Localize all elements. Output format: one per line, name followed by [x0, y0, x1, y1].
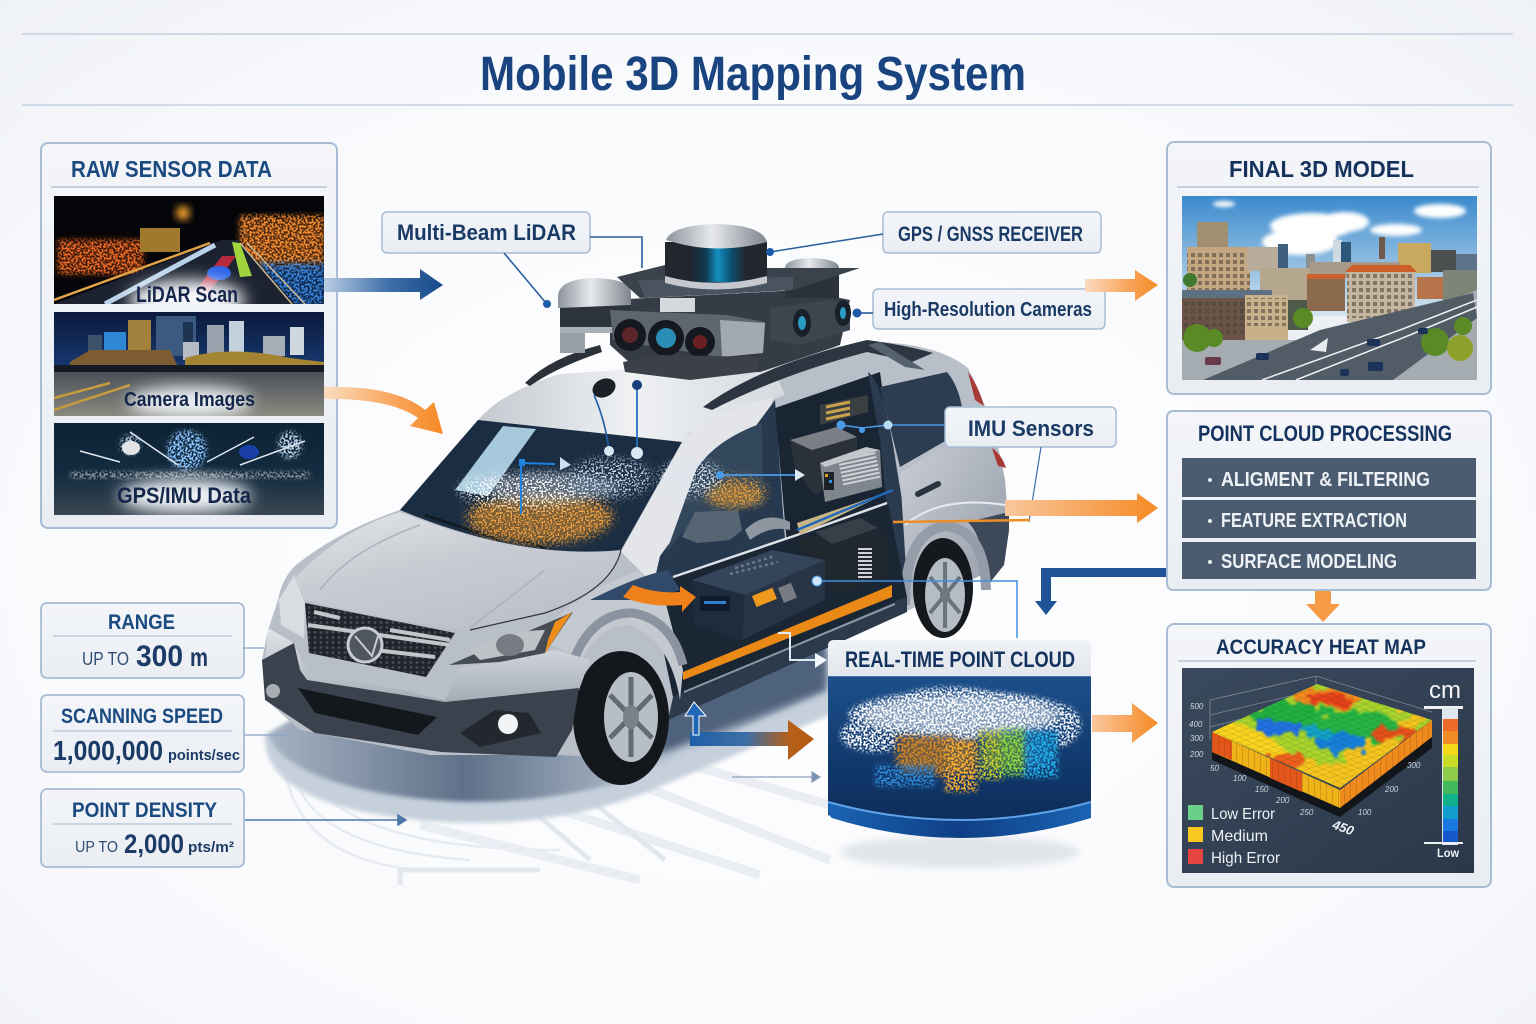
axis labels: 250 — [1299, 808, 1314, 817]
pillar between compartments — [868, 372, 908, 600]
stat: scanning speed — [41, 695, 244, 772]
door trim — [745, 518, 790, 540]
stat: scanning speed: SCANNING SPEED — [61, 705, 223, 728]
roof — [478, 360, 785, 442]
arrow: sill to point cloud — [778, 633, 827, 668]
roof rack right — [703, 340, 933, 410]
label: Camera Images — [124, 389, 255, 411]
base lip — [828, 802, 1091, 838]
tail lights — [968, 372, 1006, 468]
axis labels: 500 — [1190, 702, 1204, 711]
roof rack left — [525, 345, 602, 386]
right pod — [785, 258, 839, 298]
beige shelf — [797, 490, 893, 535]
arrow: small ground arrow — [732, 772, 820, 782]
rear wheel arch — [905, 526, 986, 605]
stat: range: RANGE — [108, 611, 175, 634]
grille — [305, 603, 455, 677]
callout: multi-beam lidar — [382, 212, 590, 253]
heading: RAW SENSOR DATA — [71, 156, 272, 182]
color scale — [1424, 677, 1463, 860]
orange-red patches on face — [1212, 732, 1302, 792]
right face — [1340, 720, 1432, 808]
axis labels: 100 — [1358, 808, 1372, 817]
fog light housing — [460, 710, 541, 747]
left pod — [558, 278, 631, 353]
panel: accuracy heat map — [1167, 624, 1491, 887]
stat: point density: POINT DENSITY — [72, 799, 217, 822]
axis labels: 150 — [1255, 785, 1269, 794]
stat: range: UP TO — [82, 649, 129, 669]
stat: point density — [41, 789, 244, 867]
axis labels — [1189, 702, 1421, 839]
lower intake — [298, 688, 437, 735]
axis labels: 100 — [1233, 774, 1247, 783]
panel: real-time point cloud — [828, 640, 1091, 838]
windshield connector lines — [519, 380, 805, 514]
step: surface modeling: SURFACE MODELING — [1221, 551, 1397, 573]
left fog light — [266, 684, 280, 698]
windshield glare — [455, 426, 536, 496]
heading: ACCURACY HEAT MAP — [1216, 636, 1426, 659]
arrow: to final model — [1085, 270, 1158, 301]
lower sill — [668, 597, 907, 720]
axis labels: 300 — [1407, 761, 1421, 770]
callout: imu sensors — [945, 407, 1116, 447]
equipment deck — [610, 290, 850, 372]
title: Mobile 3D Mapping System — [480, 48, 1026, 101]
left face — [1212, 732, 1340, 808]
arrow: camera images to vehicle — [324, 387, 443, 434]
axis labels: 50 — [1210, 764, 1219, 773]
face voxel grid — [1212, 720, 1432, 808]
panel: point cloud processing — [1167, 411, 1491, 590]
badge — [348, 628, 382, 662]
axis labels: 400 — [1189, 720, 1203, 729]
dark shadow under sill — [590, 640, 826, 770]
front bumper silver — [265, 628, 590, 703]
front bumper dark — [262, 643, 579, 757]
A pillar and door — [621, 398, 772, 590]
rear window — [880, 372, 962, 467]
left headlight — [279, 575, 305, 638]
step: alignment and filtering — [1182, 458, 1476, 497]
arrow: to point cloud processing — [1005, 493, 1158, 523]
step: feature extraction: FEATURE EXTRACTION — [1221, 510, 1407, 532]
arrow: to heat map — [1092, 703, 1158, 743]
step: feature extraction — [1182, 500, 1476, 538]
arrow: lower flow — [690, 720, 814, 760]
leader lines: multi-beam lidar — [504, 237, 642, 308]
car body silhouette — [262, 342, 1009, 760]
front wheel — [573, 651, 669, 785]
rear lower dark panel — [968, 512, 1009, 590]
mounting rails — [617, 265, 860, 298]
image: lidar scan — [54, 196, 324, 304]
stat: point density: pts/m² — [188, 839, 234, 856]
arrow: processing to heat map — [1306, 590, 1340, 622]
axis labels: 450 — [1329, 816, 1357, 839]
front fender — [540, 570, 683, 700]
camera mount — [623, 355, 760, 380]
step: surface modeling — [1182, 542, 1476, 579]
axis labels: 300 — [1190, 734, 1204, 743]
car ground shadow — [268, 640, 826, 802]
stat: range: m — [190, 642, 208, 672]
second lower box — [800, 518, 888, 593]
step: alignment and filtering: ALIGMENT & FILTERING — [1221, 469, 1430, 491]
arrow: point density — [245, 815, 406, 825]
camera block — [610, 298, 765, 357]
cutaway upper compartment — [775, 372, 898, 545]
axis labels: 200 — [1384, 785, 1399, 794]
callout: high-resolution cameras: High-Resolution Cameras — [884, 299, 1092, 321]
callout: gps receiver: GPS / GNSS RECEIVER — [898, 223, 1083, 246]
fog light — [498, 714, 518, 734]
leader: recorder to point cloud — [812, 576, 1017, 638]
color scale: Low — [1437, 846, 1460, 860]
axis labels: 200 — [1189, 750, 1204, 759]
legend: Medium — [1211, 828, 1268, 845]
shadow under point cloud panel — [840, 836, 1080, 868]
panel: final 3d model — [1167, 142, 1491, 394]
stat: point density: 2,000 — [124, 829, 184, 859]
heat surface — [1212, 684, 1432, 788]
callout: imu sensors: IMU Sensors — [968, 416, 1094, 441]
arrow: up — [685, 702, 706, 735]
stat: scanning speed: points/sec — [168, 747, 240, 764]
hood — [295, 512, 621, 630]
chart background — [1182, 668, 1474, 873]
floor map pattern — [285, 765, 830, 885]
stat: point density: UP TO — [75, 839, 118, 856]
upper rack boxes — [790, 395, 882, 502]
car outer ground shadow — [265, 650, 830, 823]
door window point cloud — [658, 460, 767, 508]
window sill trim — [673, 503, 887, 577]
front door panel — [650, 400, 785, 600]
stat: range — [41, 603, 244, 678]
label: GPS/IMU Data — [117, 483, 252, 508]
stat: range: 300 — [136, 640, 183, 673]
right headlight — [449, 612, 573, 665]
orange sill stripe — [683, 585, 892, 680]
roof sensor assembly — [558, 224, 860, 380]
legend — [1188, 805, 1281, 867]
base plate — [1212, 735, 1432, 817]
front door window — [665, 423, 763, 556]
arrow: lidar scan to vehicle — [324, 269, 443, 300]
cloud glow — [860, 695, 1060, 773]
image: gps imu data — [54, 423, 324, 515]
connector: scanning speed — [244, 734, 290, 736]
color scale: cm — [1429, 677, 1461, 704]
callout: high-resolution cameras — [873, 289, 1105, 329]
city image — [1182, 196, 1477, 380]
central lidar — [665, 224, 767, 290]
vehicle — [262, 340, 1009, 785]
dome camera on roof — [589, 375, 619, 401]
connector: range — [244, 647, 264, 649]
cloud visual — [840, 687, 1081, 792]
orange side line — [893, 520, 1030, 522]
callout: multi-beam lidar: Multi-Beam LiDAR — [397, 220, 576, 245]
axis labels: 200 — [1275, 796, 1290, 805]
panel: real-time point cloud: REAL-TIME POINT CLOUD — [845, 647, 1075, 672]
rear body panel — [900, 407, 1009, 600]
main recorder box — [692, 550, 825, 640]
right camera housings — [770, 300, 851, 345]
heading: FINAL 3D MODEL — [1229, 156, 1414, 182]
door handle — [918, 484, 938, 494]
panel: raw sensor data — [41, 143, 337, 528]
legend: High Error — [1211, 850, 1281, 867]
arrow: processing to point cloud — [1035, 568, 1182, 615]
leader line: cameras — [852, 308, 873, 318]
stat: scanning speed: 1,000,000 — [53, 735, 163, 766]
label: LiDAR Scan — [136, 282, 238, 307]
rear wheel — [913, 538, 973, 638]
leader line: gps — [766, 234, 883, 256]
image: camera images — [54, 312, 324, 417]
legend: Low Error — [1211, 806, 1276, 823]
header — [828, 640, 1091, 677]
lower equipment bay — [655, 503, 907, 697]
leader lines: imu — [836, 420, 1041, 522]
callout: gps receiver — [883, 212, 1101, 253]
back wireframe — [1210, 676, 1432, 740]
lower sensor plate — [638, 277, 793, 298]
heading: POINT CLOUD PROCESSING — [1198, 421, 1452, 446]
arrow: orange flow into recorder — [623, 585, 696, 612]
windshield — [400, 420, 682, 552]
side mirror — [682, 510, 742, 543]
wiper arms — [425, 515, 545, 548]
windshield point cloud — [458, 458, 652, 545]
